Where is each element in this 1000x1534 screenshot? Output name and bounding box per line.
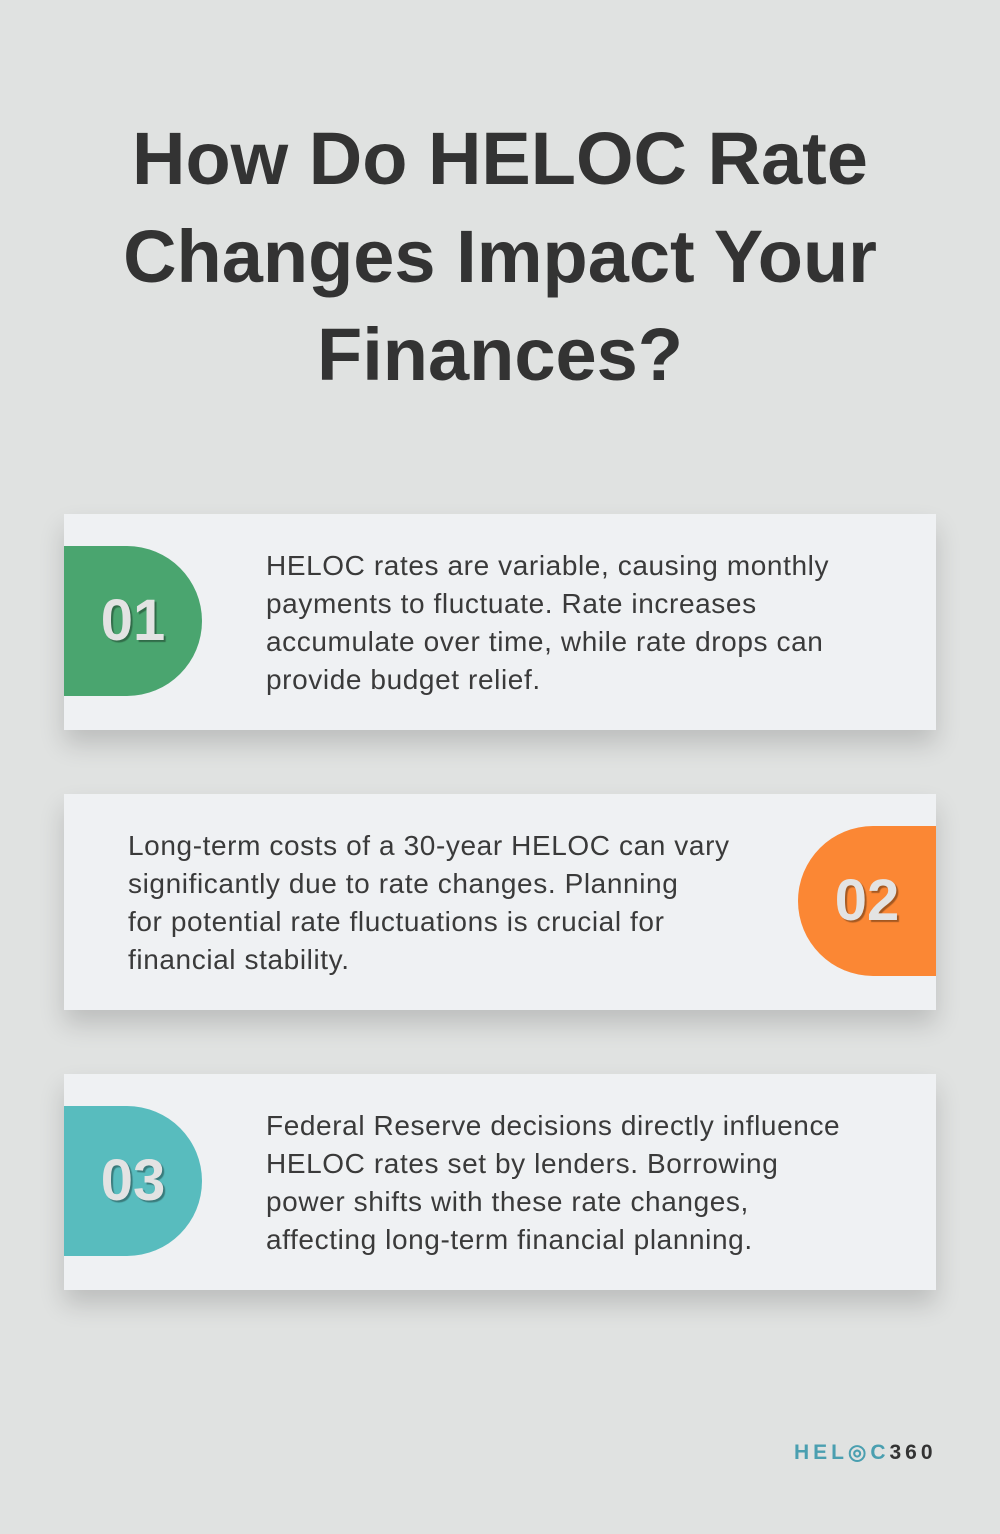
badge 02 (798, 826, 936, 976)
panel: card 03 (64, 1074, 936, 1290)
text 01: payments to fluctuate. Rate increases (266, 588, 757, 619)
text 03: power shifts with these rate changes, (266, 1186, 749, 1217)
logo: HEL◎C360 (794, 1441, 937, 1464)
text 02 (128, 830, 730, 975)
text 02: Long-term costs of a 30-year HELOC can vary (128, 830, 730, 861)
title (123, 117, 877, 396)
panel: card 02 (64, 794, 936, 1010)
text 01: HELOC rates are variable, causing monthly (266, 550, 829, 581)
text 02: significantly due to rate changes. Planning (128, 868, 678, 899)
badge 01 (64, 546, 202, 696)
title: How Do HELOC Rate (132, 117, 868, 200)
text 01 (266, 550, 829, 695)
text 02: for potential rate fluctuations is crucial for (128, 906, 665, 937)
text 03: Federal Reserve decisions directly influence (266, 1110, 840, 1141)
text 01: provide budget relief. (266, 664, 541, 695)
badge 03: 03 (101, 1148, 165, 1213)
badge 01: 01 (101, 588, 165, 653)
title: Changes Impact Your (123, 215, 877, 298)
text 03 (266, 1110, 840, 1255)
panel: card 01 (64, 514, 936, 730)
text 03: HELOC rates set by lenders. Borrowing (266, 1148, 778, 1179)
text 02: financial stability. (128, 944, 350, 975)
text 01: accumulate over time, while rate drops can (266, 626, 823, 657)
text 03: affecting long-term financial planning. (266, 1224, 753, 1255)
title: Finances? (317, 313, 683, 396)
badge 03 (64, 1106, 202, 1256)
badge 02: 02 (835, 868, 899, 933)
